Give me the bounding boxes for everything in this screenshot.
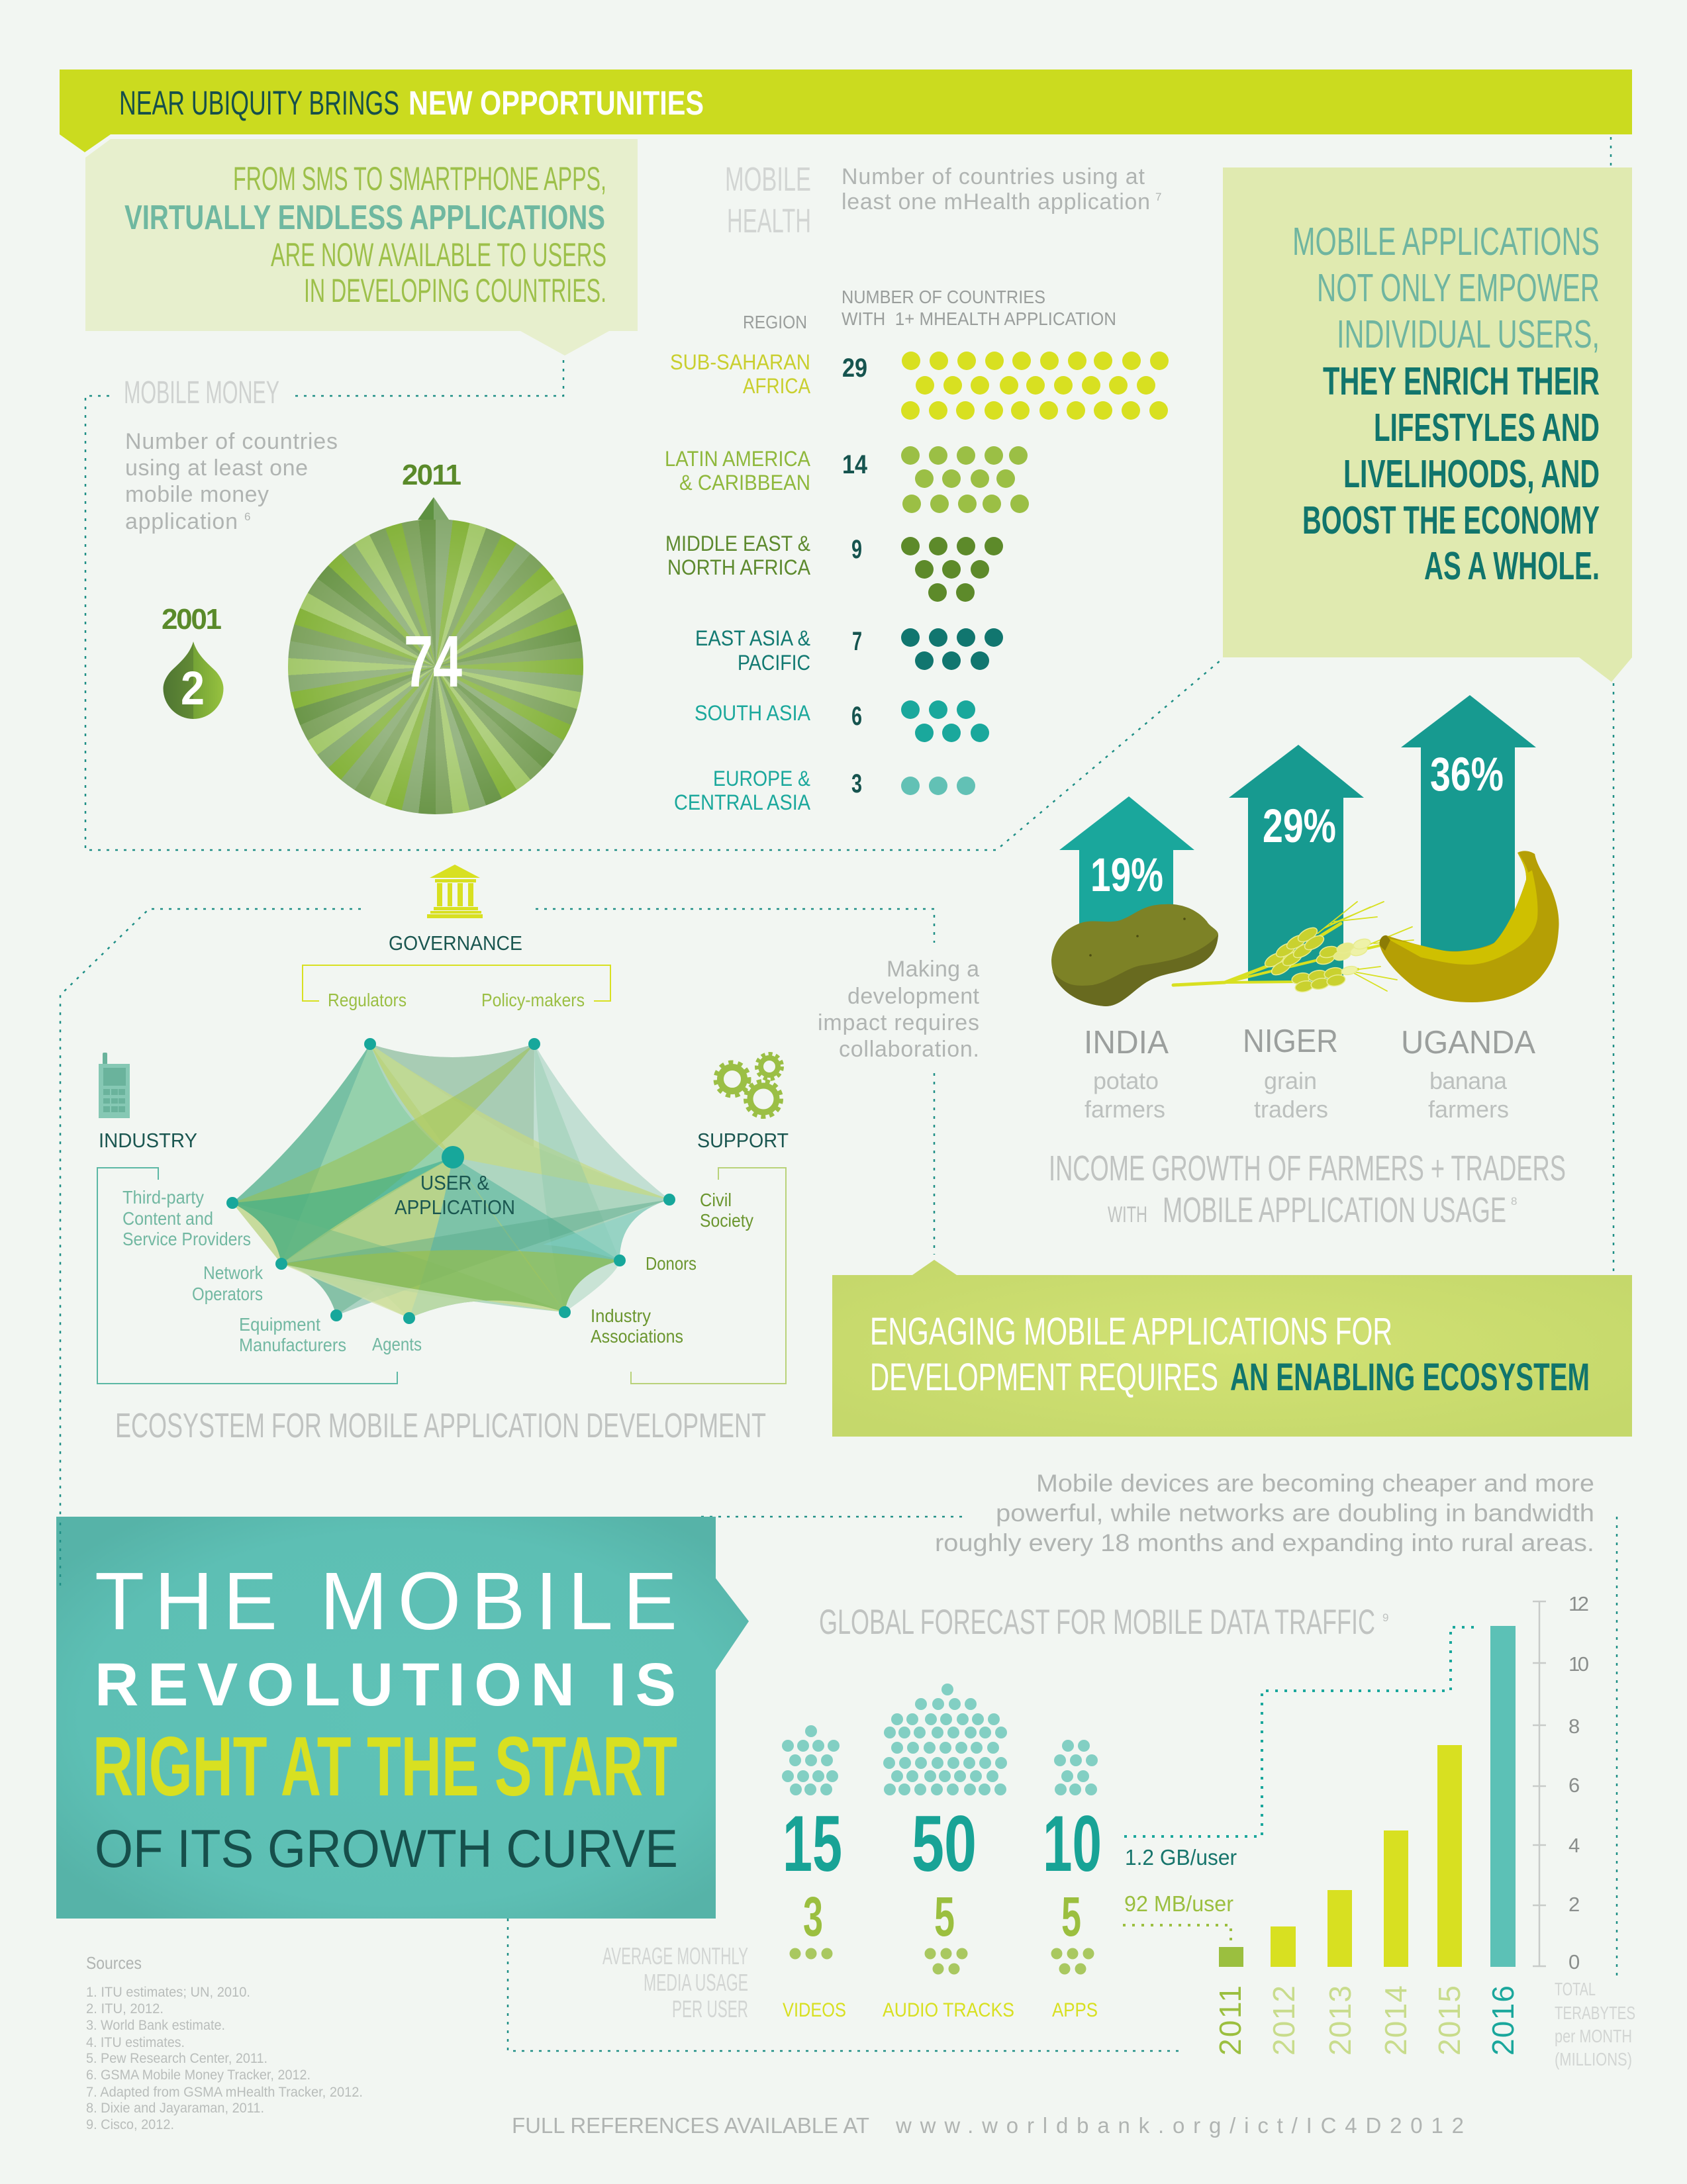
2016 usage numbers: 10: [1043, 1799, 1102, 1888]
bracket: governance members: [303, 965, 610, 1010]
row: Middle East & North Africa: MIDDLE EAST &: [665, 532, 810, 555]
dotted connector left side: [60, 909, 361, 1589]
banner: enabling ecosystem: ENGAGING MOBILE APPLICATIONS FOR: [870, 1310, 1392, 1353]
row: Europe & Central Asia: EUROPE &: [713, 767, 810, 790]
icon: governance building: [427, 865, 483, 918]
pie value 74: 74: [404, 621, 462, 702]
icon: wheat: [1173, 902, 1420, 994]
paragraph: cheaper devices: [935, 1470, 1594, 1556]
bracket: governance members: Regulators: [328, 990, 407, 1010]
title panel: the mobile revolution: RIGHT AT THE START: [93, 1719, 677, 1813]
bar year labels: 2012: [1267, 1985, 1301, 2056]
row: Latin America & Caribbean: 14: [842, 450, 868, 479]
footer: references: [512, 2113, 1464, 2138]
dotted connector around mobile sections: [85, 356, 1221, 850]
sources: 3. World Bank estimate.: [86, 2018, 225, 2033]
support actor labels: Associations: [591, 1326, 683, 1347]
icon: potato: [1051, 904, 1218, 1006]
header bar: [60, 70, 1632, 152]
pie pointer triangle: [418, 497, 449, 520]
bar chart: mobile data traffic: [1219, 1626, 1516, 1967]
bar axis: 2: [1568, 1893, 1580, 1916]
bar year labels: 2014: [1378, 1985, 1413, 2056]
bar year labels: 2011: [1213, 1985, 1247, 2056]
callout: endless applications: IN DEVELOPING COUNTRIES.: [304, 272, 606, 309]
paragraph: cheaper devices: powerful, while networks are doubling in bandwidth: [996, 1499, 1594, 1527]
banner: enabling ecosystem: DEVELOPMENT REQUIRES: [870, 1356, 1218, 1399]
header bar: NEW OPPORTUNITIES: [409, 84, 704, 122]
row: Europe & Central Asia: [674, 767, 975, 814]
2011 usage numbers: [803, 1885, 1081, 1948]
support actor labels: Donors: [646, 1253, 697, 1274]
heading: mobile money: MOBILE MONEY: [124, 375, 279, 410]
collaboration note: [818, 957, 980, 1062]
column heading: region: REGION: [743, 312, 807, 332]
callout: mobile applications empower: [1223, 167, 1632, 682]
crop labels: banana: [1429, 1067, 1508, 1094]
label: average monthly media usage: AVERAGE MONTHLY: [602, 1942, 748, 1970]
year label 2011: 2011: [402, 459, 461, 491]
collaboration note: impact requires: [818, 1010, 979, 1035]
collaboration note: Making a: [887, 957, 979, 982]
row: South Asia: 6: [851, 702, 862, 731]
dotted connector: lower section: [508, 1517, 1617, 2051]
mobile money description: application: [125, 509, 238, 534]
row: East Asia & Pacific: 7: [852, 627, 862, 656]
mobile money description: [125, 429, 338, 534]
bar year labels: 2013: [1323, 1985, 1357, 2056]
axis caption: total terabytes: per MONTH: [1555, 2026, 1632, 2046]
footer: references: www.worldbank.org/ict/IC4D2012: [895, 2113, 1464, 2138]
title panel: the mobile revolution: THE MOBILE: [95, 1556, 677, 1647]
industry actor labels: Service Providers: [122, 1229, 251, 1249]
mobile money description: using at least one: [125, 455, 308, 481]
arrow: Niger 29%: [1229, 745, 1364, 982]
axis caption: total terabytes: (MILLIONS): [1555, 2049, 1632, 2069]
sources: 7. Adapted from GSMA mHealth Tracker, 2012.: [86, 2085, 363, 2100]
2011 usage numbers: 3: [803, 1885, 823, 1948]
bar year labels: 2016: [1486, 1985, 1520, 2056]
axis caption: total terabytes: [1555, 1979, 1635, 2069]
row: Sub-Saharan Africa: 29: [842, 354, 867, 383]
heading: mobile health: HEALTH: [727, 202, 811, 240]
callout: endless applications: ARE NOW AVAILABLE TO USERS: [271, 236, 606, 273]
support actor labels: Civil: [700, 1190, 732, 1210]
2016 usage numbers: 50: [912, 1799, 977, 1888]
bar axis: 6: [1568, 1774, 1580, 1797]
heading: global forecast: GLOBAL FORECAST FOR MOBILE DATA TRAFFIC: [819, 1603, 1375, 1642]
support actor labels: [591, 1190, 753, 1347]
bar axis: 12: [1568, 1592, 1589, 1615]
row: Sub-Saharan Africa: [670, 350, 1169, 420]
footer: references: FULL REFERENCES AVAILABLE AT: [512, 2113, 869, 2138]
usage callout: 1.2 GB/user: 1.2 GB/user: [1125, 1845, 1237, 1870]
percent labels: [1090, 749, 1504, 902]
bar axis: 10: [1568, 1652, 1589, 1676]
mobile health description: [842, 164, 1161, 214]
dotted connector: collaboration: [536, 909, 934, 1255]
ecosystem network web: [226, 1038, 675, 1324]
crop labels: INDIA: [1084, 1025, 1169, 1061]
income growth caption: [1049, 1149, 1566, 1230]
column heading: number of countries: NUMBER OF COUNTRIES: [842, 287, 1045, 307]
2016 usage numbers: [783, 1799, 1102, 1888]
label: average monthly media usage: MEDIA USAGE: [644, 1969, 748, 1996]
bracket: support: [631, 1168, 786, 1384]
label: average monthly media usage: [602, 1942, 748, 2022]
row: East Asia & Pacific: EAST ASIA &: [695, 626, 810, 650]
title panel: the mobile revolution: [56, 1517, 749, 1919]
support actor labels: Society: [700, 1210, 753, 1231]
year label 2001: 2001: [162, 603, 222, 636]
media type labels: VIDEOS: [783, 1999, 846, 2021]
2011 usage numbers: 5: [1061, 1885, 1081, 1948]
dotted segment over title panel: [60, 1523, 61, 1589]
paragraph: cheaper devices: roughly every 18 months and expanding into rural areas.: [935, 1529, 1594, 1556]
media usage: videos dots 15: [782, 1725, 840, 1795]
icon: gears: [716, 1054, 782, 1117]
label: user & application: USER &: [420, 1171, 489, 1194]
sources: [86, 1953, 363, 2132]
bar axis: 8: [1568, 1715, 1580, 1738]
percent labels: 29%: [1263, 800, 1336, 853]
row: East Asia & Pacific: [695, 626, 1003, 675]
heading: support: SUPPORT: [697, 1129, 789, 1152]
callout: endless applications: VIRTUALLY ENDLESS APPLICATIONS: [124, 199, 605, 237]
row: Middle East & North Africa: NORTH AFRICA: [667, 555, 811, 579]
icon: drop with value 2: [163, 641, 224, 719]
sources: 4. ITU estimates.: [86, 2035, 185, 2050]
bar year labels: [1213, 1985, 1520, 2056]
industry actor labels: Operators: [192, 1284, 263, 1304]
bar axis: 0: [1568, 1950, 1580, 1973]
bracket: industry: [97, 1168, 397, 1384]
bar axis: [1533, 1592, 1589, 1973]
media type labels: [783, 1999, 1098, 2021]
collaboration note: collaboration.: [839, 1037, 979, 1062]
header bar: NEAR UBIQUITY BRINGS: [119, 84, 399, 122]
heading: mobile health: [725, 160, 811, 240]
arrow: Uganda 36%: [1401, 695, 1536, 957]
collaboration note: development: [847, 984, 980, 1009]
label: average monthly media usage: PER USER: [672, 1995, 748, 2022]
industry actor labels: Content and: [122, 1208, 213, 1229]
industry actor labels: Network: [203, 1262, 264, 1283]
row: Middle East & North Africa: [665, 532, 1003, 602]
row: East Asia & Pacific: PACIFIC: [738, 651, 810, 675]
axis caption: total terabytes: TOTAL: [1555, 1979, 1596, 1999]
sources: 8. Dixie and Jayaraman, 2011.: [86, 2101, 264, 2116]
pie chart: 2011 mobile money rays: [288, 519, 583, 814]
row: Middle East & North Africa: 9: [851, 535, 862, 564]
2016 usage numbers: 15: [783, 1799, 842, 1888]
callout: mobile applications empower: AS A WHOLE.: [1424, 544, 1600, 588]
mobile money description: Number of countries: [125, 429, 338, 454]
callout: endless applications: [85, 139, 638, 356]
icon: mobile phone: [99, 1053, 130, 1118]
sources: 5. Pew Research Center, 2011.: [86, 2051, 267, 2066]
row: South Asia: SOUTH ASIA: [695, 701, 811, 725]
axis caption: total terabytes: TERABYTES: [1555, 2003, 1635, 2023]
mobile health description: 7: [1155, 191, 1161, 203]
crop labels: farmers: [1084, 1096, 1165, 1123]
paragraph: cheaper devices: Mobile devices are becoming cheaper and more: [1036, 1470, 1594, 1497]
industry actor labels: [122, 1187, 422, 1355]
heading: governance: GOVERNANCE: [389, 931, 522, 955]
2011 usage numbers: 5: [934, 1885, 955, 1948]
usage callout: 92 MB/user: [1123, 1891, 1233, 1942]
media usage: audio dots 50: [883, 1684, 1007, 1795]
crop labels: farmers: [1428, 1096, 1509, 1123]
2011 usage dots: [789, 1948, 1094, 1974]
crop labels: [1084, 1023, 1535, 1123]
crop labels: UGANDA: [1401, 1025, 1535, 1061]
row: Europe & Central Asia: CENTRAL ASIA: [674, 790, 811, 814]
income growth caption: WITH: [1108, 1202, 1147, 1227]
mobile money description: 6: [244, 510, 250, 523]
industry actor labels: Agents: [372, 1334, 422, 1354]
row: Latin America & Caribbean: [665, 446, 1029, 513]
banner: enabling ecosystem: [832, 1260, 1632, 1437]
sources: Sources: [86, 1953, 142, 1973]
label: user & application: APPLICATION: [395, 1196, 515, 1219]
mobile money description: mobile money: [125, 482, 269, 507]
column heading: number of countries: [842, 287, 1116, 329]
bar year labels: 2015: [1432, 1985, 1467, 2056]
callout: endless applications: FROM SMS TO SMARTPHONE APPS,: [233, 160, 606, 197]
title panel: the mobile revolution: REVOLUTION IS: [95, 1651, 676, 1719]
sources: 6. GSMA Mobile Money Tracker, 2012.: [86, 2067, 311, 2083]
media usage: apps dots 10: [1054, 1740, 1098, 1795]
sources: 9. Cisco, 2012.: [86, 2117, 174, 2132]
title panel: the mobile revolution: OF ITS GROWTH CURVE: [95, 1819, 678, 1879]
icon: banana: [1380, 851, 1559, 1002]
percent labels: 19%: [1090, 849, 1163, 902]
dotted connector from header to callout: [1610, 137, 1612, 166]
bracket: governance members: Policy-makers: [481, 990, 585, 1010]
heading: mobile health: MOBILE: [725, 160, 811, 198]
crop labels: grain: [1264, 1067, 1317, 1094]
heading: industry: INDUSTRY: [99, 1129, 197, 1152]
media type labels: AUDIO TRACKS: [883, 1999, 1014, 2021]
row: Europe & Central Asia: 3: [851, 769, 862, 798]
industry actor labels: Third-party: [122, 1187, 204, 1208]
mobile health description: least one mHealth application: [842, 189, 1150, 214]
icon: drop with value 2: 2: [181, 663, 205, 715]
row: Sub-Saharan Africa: AFRICA: [743, 374, 811, 398]
media type labels: APPS: [1052, 1999, 1098, 2021]
crop labels: potato: [1093, 1067, 1159, 1094]
usage callout: 92 MB/user: 92 MB/user: [1124, 1891, 1233, 1916]
support actor labels: Industry: [591, 1306, 651, 1326]
income growth caption: 8: [1511, 1195, 1517, 1208]
usage callout: 1.2 GB/user: [1124, 1627, 1480, 1870]
row: Latin America & Caribbean: & CARIBBEAN: [679, 471, 810, 495]
dotted connector right side: [1613, 683, 1614, 1271]
label: user & application: [395, 1171, 515, 1219]
bar axis: 4: [1568, 1834, 1580, 1857]
mobile health description: Number of countries using at: [842, 164, 1145, 189]
arrow: India 19%: [1059, 796, 1194, 953]
crop labels: NIGER: [1243, 1023, 1338, 1059]
crop labels: traders: [1254, 1096, 1328, 1123]
industry actor labels: Equipment: [239, 1314, 320, 1335]
column heading: number of countries: WITH 1+ MHEALTH APPLICATION: [842, 309, 1116, 329]
heading: global forecast: [819, 1603, 1388, 1642]
percent labels: 36%: [1430, 749, 1504, 801]
sources: 1. ITU estimates; UN, 2010.: [86, 1985, 250, 2000]
sources: 2. ITU, 2012.: [86, 2001, 164, 2017]
income growth caption: MOBILE APPLICATION USAGE: [1163, 1190, 1506, 1230]
heading: global forecast: 9: [1382, 1611, 1388, 1624]
heading: ecosystem: ECOSYSTEM FOR MOBILE APPLICATION DEVELOPMENT: [115, 1407, 766, 1445]
industry actor labels: Manufacturers: [239, 1335, 346, 1355]
row: South Asia: [695, 700, 989, 742]
row: Sub-Saharan Africa: SUB-SAHARAN: [670, 350, 810, 374]
row: Latin America & Caribbean: LATIN AMERICA: [665, 447, 811, 471]
